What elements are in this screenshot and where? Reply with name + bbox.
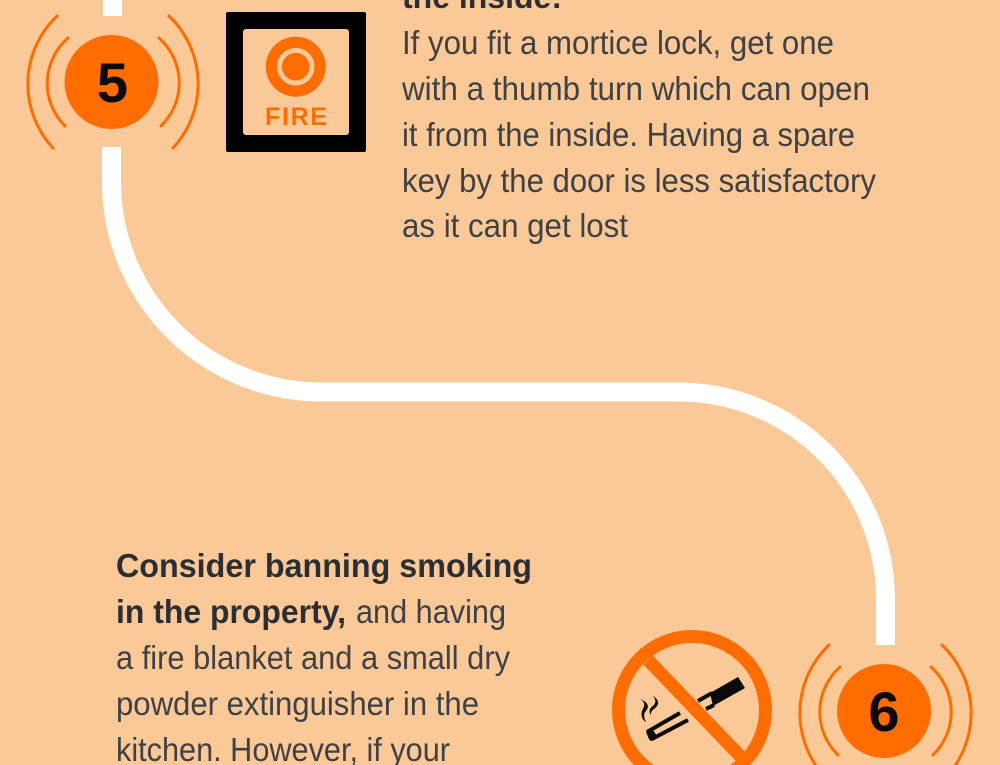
step 6 marker [800,645,971,765]
text block: thumb turn lock advice: it from the inside. Having a spare [402,116,855,153]
text block: smoking ban advice: in the property, [116,593,346,630]
text block: smoking ban advice: a fire blanket and a small dry [116,639,510,676]
text block: smoking ban advice: powder extinguisher in the [116,685,479,722]
icon: fire alarm call point [226,12,366,152]
text block: smoking ban advice [116,547,532,765]
text block: smoking ban advice: Consider banning smoking [116,547,532,584]
text block: thumb turn lock advice [401,0,876,244]
text block: smoking ban advice: and having [356,593,506,630]
connector path from step 5 to step 6 [112,0,886,645]
icon: fire alarm call point: FIRE [265,103,327,131]
icon: no smoking sign [618,636,766,765]
step 5 marker: 5 [97,51,128,114]
text block: thumb turn lock advice: key by the door is less satisfactory [402,162,876,199]
text block: thumb turn lock advice: If you fit a mortice lock, get one [402,24,834,61]
text block: thumb turn lock advice: as it can get lost [402,207,628,244]
step 6 marker: 6 [868,680,900,743]
step 5 marker [28,16,198,148]
text block: thumb turn lock advice: with a thumb turn which can open [401,70,870,107]
